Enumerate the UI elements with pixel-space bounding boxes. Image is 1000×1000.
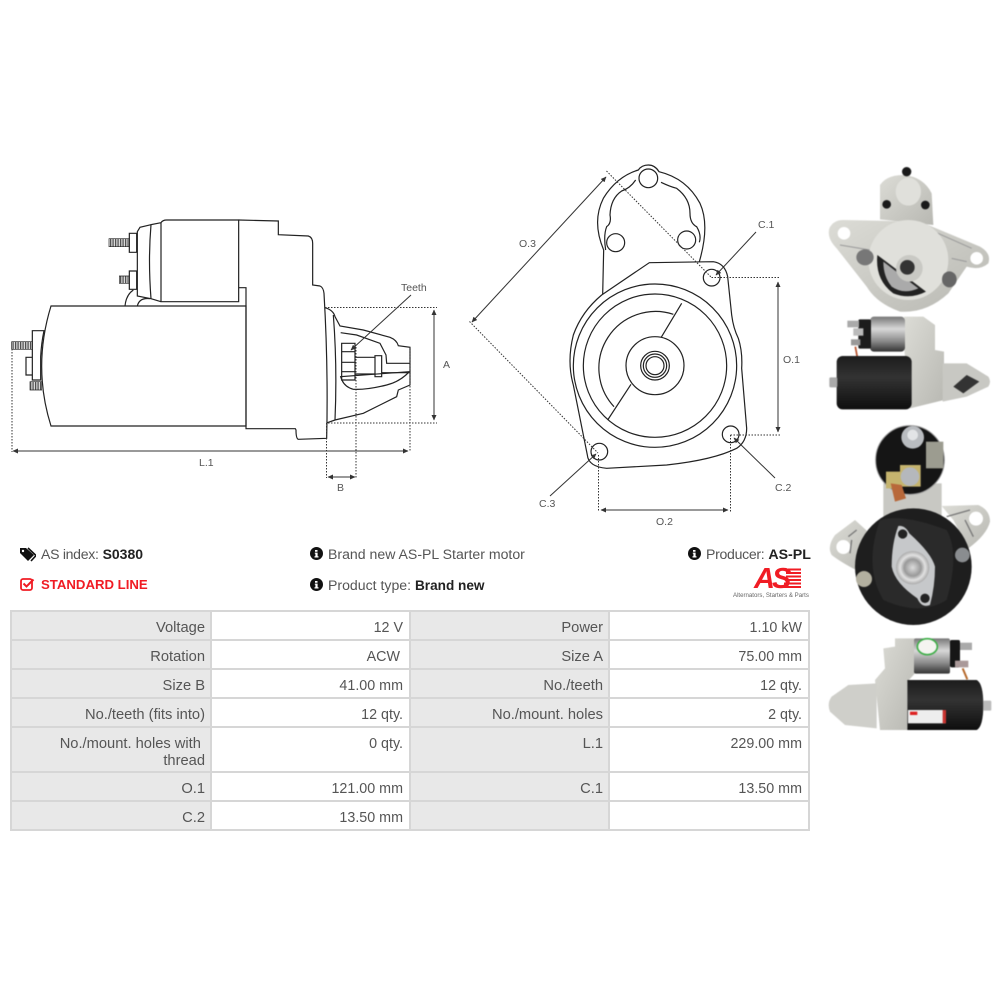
icon: info <box>310 547 323 560</box>
front view labels: C.1 <box>758 219 774 231</box>
side view labels: Teeth <box>401 282 427 294</box>
specifications table: O.1 <box>181 781 205 797</box>
icon: checkbox <box>20 578 34 591</box>
info: brand new starter motor: Brand new AS-PL Starter motor <box>328 546 525 562</box>
specifications table: Size A <box>561 649 603 665</box>
rear mounting ear <box>598 165 705 295</box>
motor body <box>42 306 246 426</box>
side view labels: A <box>443 359 450 371</box>
info: product type: Product type: Brand new <box>328 577 484 593</box>
specifications table: 12 V <box>374 620 403 636</box>
icon: tags <box>20 547 36 562</box>
info: producer: Producer: AS-PL <box>706 546 811 563</box>
specifications table: 75.00 mm <box>738 649 802 665</box>
info: AS index: AS index: S0380 <box>41 546 143 562</box>
side view labels: B <box>337 482 344 494</box>
solenoid terminals <box>109 239 129 283</box>
motor rear terminals <box>12 342 42 390</box>
drive nose <box>325 308 410 423</box>
specifications table: 2 qty. <box>768 707 802 723</box>
photo: rear end view <box>830 426 990 625</box>
front view labels <box>519 219 800 528</box>
specifications table: L.1 <box>583 736 603 752</box>
central hub <box>626 337 684 395</box>
photo: side view with label <box>829 638 991 730</box>
specifications table: thread <box>163 752 205 768</box>
front view labels: C.2 <box>775 482 792 494</box>
specifications table: Rotation <box>150 649 205 665</box>
specifications table: No./mount. holes <box>492 707 603 723</box>
specifications table <box>10 610 810 831</box>
logo stripes <box>784 568 801 588</box>
specifications table: No./teeth (fits into) <box>85 707 205 723</box>
specifications table: 121.00 mm <box>331 781 403 797</box>
pinion teeth <box>342 343 409 380</box>
specifications table: No./teeth <box>543 678 603 694</box>
front view labels: C.3 <box>539 498 556 510</box>
front view labels: O.1 <box>783 354 800 366</box>
specifications table: 229.00 mm <box>730 736 802 752</box>
specifications table: No./mount. holes with <box>60 736 201 752</box>
specifications table: Voltage <box>156 620 205 636</box>
solenoid body <box>125 220 239 306</box>
specifications table: 12 qty. <box>760 678 802 694</box>
mounting holes <box>703 269 720 286</box>
logo: AS-PL <box>733 563 809 599</box>
specifications table: Power <box>561 620 603 636</box>
starter motor housing outline <box>239 220 327 439</box>
front view labels: O.3 <box>519 238 536 250</box>
specifications table: 41.00 mm <box>339 678 403 694</box>
front view dimension lines <box>470 171 780 512</box>
specifications table: 0 qty. <box>369 736 403 752</box>
logo: AS-PL: Alternators, Starters & Parts <box>733 592 809 599</box>
side view labels: L.1 <box>199 457 214 469</box>
icon: info <box>310 578 323 591</box>
specifications table: 1.10 kW <box>750 620 802 636</box>
logo: AS-PL: AS <box>754 563 788 595</box>
front view labels: O.2 <box>656 516 673 528</box>
icon: info <box>688 547 701 560</box>
flange rings <box>573 284 737 447</box>
info: standard line: STANDARD LINE <box>41 577 148 592</box>
specifications table: 12 qty. <box>361 707 403 723</box>
mounting plate <box>570 262 747 468</box>
specifications table: ACW <box>367 649 400 665</box>
specifications table: 13.50 mm <box>738 781 802 797</box>
specifications table: C.1 <box>580 781 603 797</box>
photo: drive end view <box>829 167 989 312</box>
specifications table: 13.50 mm <box>339 810 403 826</box>
specifications table: C.2 <box>182 810 205 826</box>
specifications table: Size B <box>163 678 205 694</box>
side view dimension lines <box>12 295 437 478</box>
photo: side view with black motor <box>829 317 990 409</box>
side view labels <box>199 282 450 494</box>
